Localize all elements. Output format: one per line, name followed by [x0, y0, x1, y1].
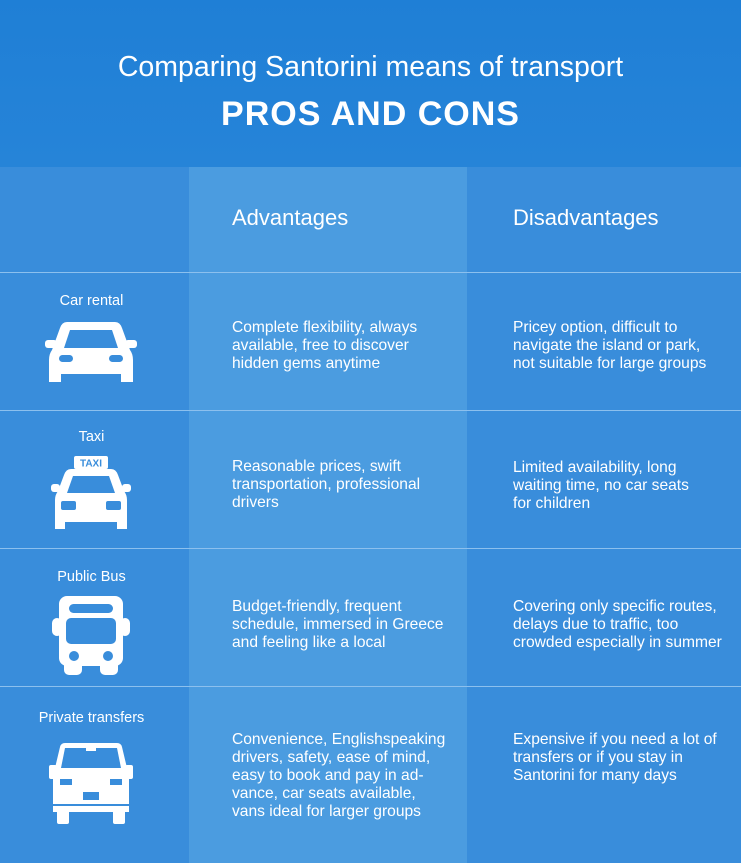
text: bus pros: and feeling like a local — [232, 634, 385, 651]
text: car cons: navigate the island or park, — [513, 337, 700, 354]
text: taxi cons: waiting time, no car seats — [513, 477, 689, 494]
text: taxi pros: Reasonable prices, swift — [232, 458, 401, 475]
text: bus cons — [513, 598, 722, 651]
text: bus pros: Budget-friendly, frequent — [232, 598, 402, 615]
subtitle: PROS AND CONS — [221, 95, 520, 133]
label: public bus: Public Bus — [57, 569, 126, 585]
text: taxi pros: transportation, professional — [232, 476, 420, 493]
text: transfers pros: drivers, safety, ease of mind, — [232, 749, 430, 766]
text: bus pros: schedule, immersed in Greece — [232, 616, 443, 633]
text: car pros: hidden gems anytime — [232, 355, 380, 372]
text: bus cons: Covering only specific routes, — [513, 598, 717, 615]
text: bus pros — [232, 598, 443, 651]
icon: van — [49, 743, 133, 824]
text: transfers cons — [513, 731, 717, 784]
text: transfers cons: Expensive if you need a lot of — [513, 731, 717, 748]
header — [0, 0, 741, 167]
text: transfers pros: easy to book and pay in ad- — [232, 767, 424, 784]
icon: taxi: TAXI — [80, 458, 102, 470]
text: bus cons: delays due to traffic, too — [513, 616, 678, 633]
heading: advantages: Advantages — [232, 205, 348, 230]
text: taxi pros: drivers — [232, 494, 279, 511]
icon: car — [45, 322, 137, 382]
advantages column background — [189, 167, 467, 863]
text: car pros — [232, 319, 417, 372]
label: car rental: Car rental — [60, 293, 123, 309]
text: transfers cons: Santorini for many days — [513, 767, 677, 784]
label: taxi: Taxi — [79, 429, 104, 445]
text: car cons: not suitable for large groups — [513, 355, 706, 372]
text: car pros: Complete flexibility, always — [232, 319, 417, 336]
icon: bus — [52, 596, 130, 675]
text: transfers cons: transfers or if you stay in — [513, 749, 683, 766]
text: transfers pros — [232, 731, 445, 820]
icon: taxi — [51, 456, 131, 529]
text: transfers pros: Convenience, Englishspeaking — [232, 731, 445, 748]
text: taxi cons: for children — [513, 495, 590, 512]
text: taxi cons — [513, 459, 689, 512]
label: private transfers: Private transfers — [39, 710, 144, 726]
text: transfers pros: vance, car seats available, — [232, 785, 416, 802]
text: car cons — [513, 319, 706, 372]
text: taxi cons: Limited availability, long — [513, 459, 677, 476]
text: transfers pros: vans ideal for larger groups — [232, 803, 421, 820]
text: bus cons: crowded especially in summer — [513, 634, 722, 651]
text: car cons: Pricey option, difficult to — [513, 319, 677, 336]
text: car pros: available, free to discover — [232, 337, 409, 354]
text: taxi pros — [232, 458, 420, 511]
heading: disadvantages: Disadvantages — [513, 205, 659, 230]
title: Comparing Santorini means of transport — [118, 51, 623, 83]
